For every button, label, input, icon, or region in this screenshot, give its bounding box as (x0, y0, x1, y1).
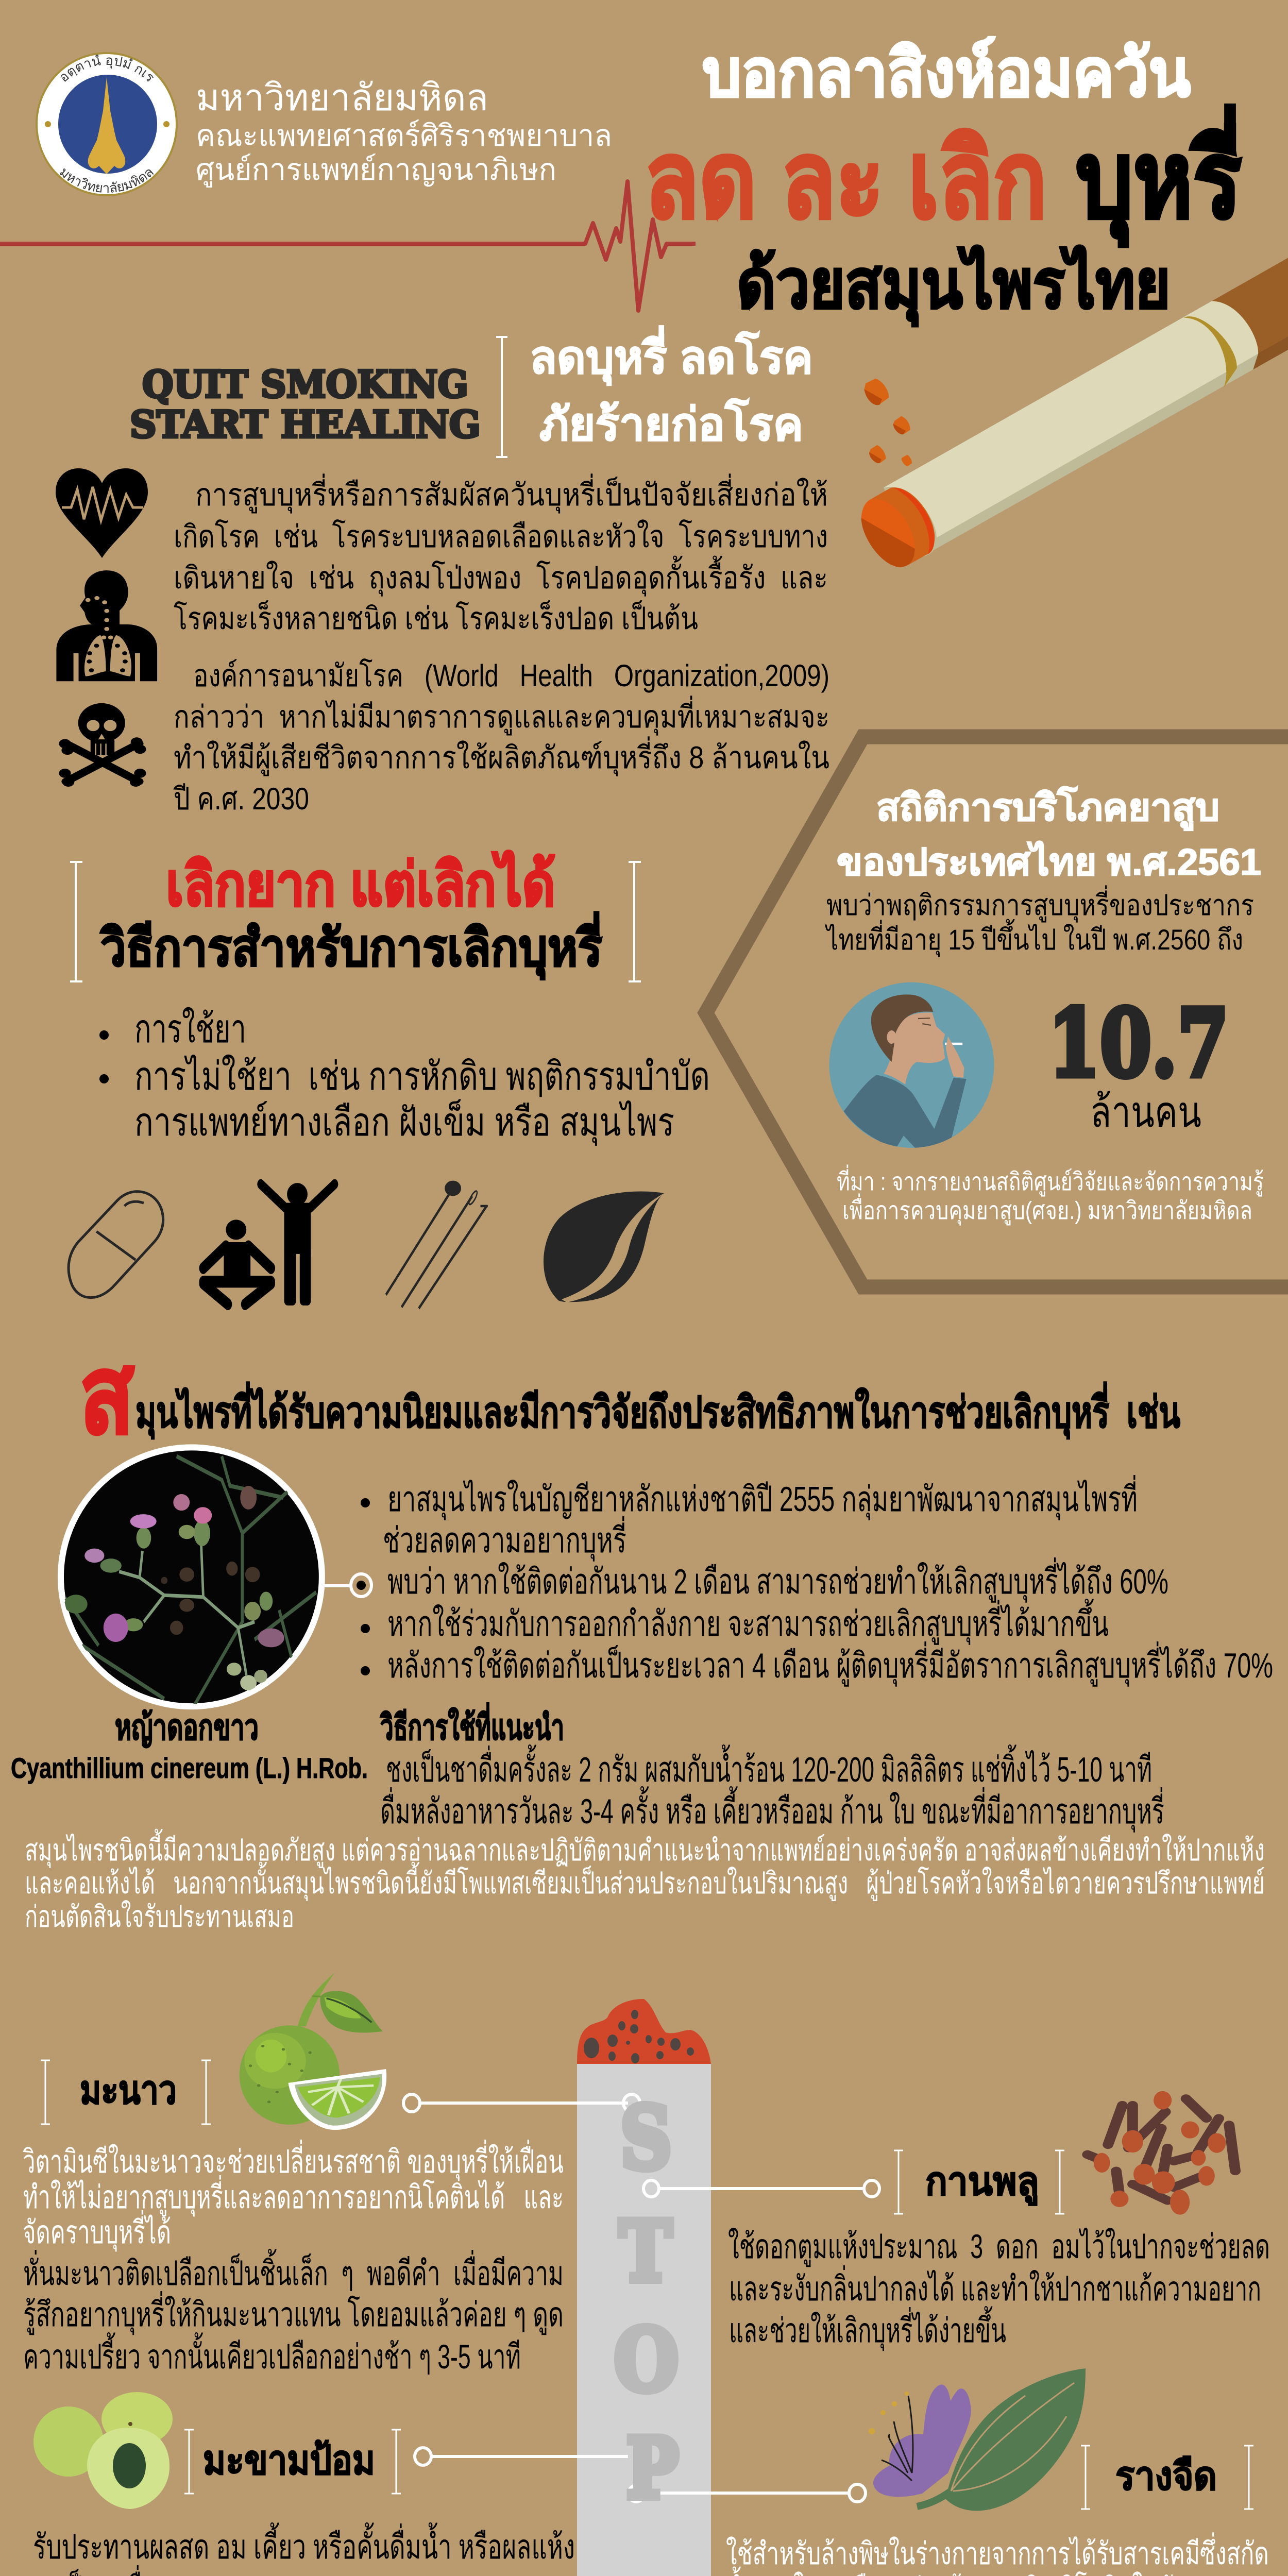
heading: clove (894, 2150, 1064, 2214)
list: herb benefits: ช่วยลดความอยากบุหรี่ (383, 1516, 626, 1562)
panel: smoking statistics text: สถิติการบริโภคยาสูบ (876, 785, 1219, 831)
statistic: 10.7 million people: ล้านคน (1090, 1088, 1201, 1136)
list: quit methods (99, 1007, 710, 1146)
text: amla usage (33, 2522, 575, 2576)
slogan: quit smoking start healing (130, 362, 481, 446)
heading: amla: มะขามป้อม (203, 2437, 375, 2483)
icon: lime fruit (240, 1973, 386, 2130)
panel: statistics outline (706, 737, 1288, 1287)
title: บอกลาสิงห์อมควัน (702, 37, 1191, 110)
header: university logo: อตฺตานํ อุปมํ กเร (61, 55, 154, 82)
STOP lettering: P (626, 2420, 679, 2517)
icon: herbal leaf (544, 1192, 664, 1302)
STOP lettering (614, 2088, 679, 2517)
text: lime benefits: จัดคราบบุหรี่ได้ (23, 2210, 171, 2251)
text block: WHO statement (173, 658, 829, 816)
icon: person with lungs (56, 570, 157, 681)
icon: person smoking (829, 982, 994, 1149)
STOP lettering: S (620, 2088, 672, 2189)
text block: safety warning (25, 1829, 1265, 1934)
icon: cigarette (861, 258, 1288, 567)
slogan: Thai headline: ลดบุหรี่ ลดโรค (530, 326, 813, 386)
header: university name text: มหาวิทยาลัยมหิดล (196, 77, 488, 118)
connector: rang chuet (658, 2484, 866, 2502)
text: clove usage (728, 2227, 1270, 2351)
caption: plant name: Cyanthillium cinereum (L.) H.Rob. (11, 1752, 368, 1784)
icon: acupuncture needles (386, 1181, 488, 1309)
title: ด้วยสมุนไพรไทย (737, 245, 1171, 327)
photo: amla fruit (33, 2392, 173, 2509)
header: university logo (36, 52, 178, 196)
text block: smoking risk intro (174, 473, 828, 636)
slogan: Thai headline (530, 326, 813, 450)
connector: amla (415, 2448, 644, 2502)
title: ลด ละ เลิก (645, 121, 1047, 240)
connector: clove (643, 2180, 879, 2197)
statistic: 10.7 million people: 10.7 (1048, 989, 1229, 1098)
text: lime usage: หั่นมะนาวติดเปลือกเป็นชิ้นเล็ก ๆ พอดีคำ เมื่อมีความ (23, 2249, 564, 2292)
text: lime usage: รู้สึกอยากบุหรี่ให้กินมะนาวแทน โดยอมแล้วค่อย ๆ ดูด (23, 2291, 564, 2335)
text: amla usage: รับประทานผลสด อม เคี้ยว หรือคั้นดื่มน้ำ หรือผลแห้ง (33, 2522, 575, 2566)
heading: rang chuet (1081, 2446, 1253, 2509)
heading: hard to quit but possible (70, 851, 641, 981)
list: quit methods: การใช้ยา (134, 1007, 246, 1051)
heading: hard to quit but possible: เลิกยาก แต่เลิกได้ (166, 851, 555, 918)
panel: smoking statistics text (825, 785, 1261, 957)
header: university name text (196, 77, 612, 188)
heading: amla (184, 2430, 401, 2494)
text block: smoking risk intro: โรคมะเร็งหลายชนิด เช่น โรคมะเร็งปอด เป็นต้น (174, 600, 698, 636)
text: lime usage (23, 2249, 564, 2376)
central cigarette (577, 1999, 711, 2576)
text: lime benefits: วิตามินซีในมะนาวจะช่วยเปลี่ยนรสชาติ ของบุหรี่ให้เฝื่อน (23, 2140, 564, 2181)
slogan: quit smoking start healing: QUIT SMOKING (142, 362, 468, 406)
slogan: Thai headline: ภัยร้ายก่อโรค (539, 398, 803, 450)
text: lime benefits (23, 2140, 564, 2251)
text block: WHO statement: องค์การอนามัยโรค (World Health Organization,2009) (193, 658, 829, 693)
panel: rang chuet (725, 2368, 1278, 2576)
caption: plant name (11, 1708, 368, 1784)
icon: pill (69, 1192, 163, 1298)
icon: ECG heartbeat line (0, 181, 696, 311)
slogan: quit smoking start healing: START HEALING (130, 402, 481, 446)
icon: heart with ECG (56, 468, 148, 558)
source note: statistics (837, 1164, 1264, 1226)
panel: smoking statistics text: ของประเทศไทย พ.ศ.2561 (837, 840, 1261, 883)
icon: skull and crossbones (59, 703, 146, 787)
heading: lime (41, 2060, 211, 2124)
text block: WHO statement: กล่าวว่า หากไม่มีมาตราการดูแลและควบคุมที่เหมาะสมจะ (174, 696, 829, 736)
text block: WHO statement: ทำให้มีผู้เสียชีวิตจากการใช้ผลิตภัณฑ์บุหรี่ถึง 8 ล้านคนใน (174, 736, 829, 776)
heading: researched herbs: ส (80, 1334, 134, 1455)
panel: clove (728, 2091, 1270, 2351)
header: university logo: มหาวิทยาลัยมหิดล (60, 168, 154, 193)
ember (577, 1999, 711, 2064)
heading: researched herbs (80, 1334, 1180, 1455)
text block: smoking risk intro: เดินหายใจ เช่น ถุงลมโป่งพอง โรคปอดอุดกั้นเรื้อรัง และ (174, 555, 828, 597)
cigarette paper (577, 2064, 711, 2576)
heading: clove: กานพลู (925, 2160, 1039, 2206)
list: quit methods: การแพทย์ทางเลือก ฝังเข็ม หรือ สมุนไพร (134, 1099, 674, 1146)
heading: lime: มะนาว (80, 2069, 177, 2112)
photo: Cyanthillium cinereum plant (61, 1447, 322, 1707)
STOP lettering: T (619, 2203, 672, 2300)
list: herb benefits (357, 1475, 1273, 1687)
text: clove usage: และช่วยให้เลิกบุหรี่ได้ง่ายขึ้น (729, 2306, 1006, 2351)
icon: meditation and exercise (204, 1183, 335, 1306)
header: university name text: ศูนย์การแพทย์กาญจนาภิเษก (196, 153, 556, 188)
STOP lettering: O (614, 2310, 679, 2411)
heading: rang chuet: รางจืด (1115, 2454, 1217, 2498)
caption: plant name: หญ้าดอกขาว (115, 1708, 259, 1748)
icon: rang chuet flower and leaf (869, 2368, 1086, 2511)
title (645, 37, 1242, 327)
text: lime usage: ความเปรี้ยว จากนั้นเคียวเปลือกอย่างช้า ๆ 3-5 นาที (23, 2332, 521, 2376)
text block: recommended usage (380, 1702, 1164, 1833)
header: university name text: คณะแพทยศาสตร์ศิริราชพยาบาล (196, 119, 612, 152)
list: quit methods: การไม่ใช้ยา เช่น การหักดิบ พฤติกรรมบำบัด (134, 1054, 710, 1098)
statistic: 10.7 million people (1048, 989, 1229, 1136)
text block: recommended usage: วิธีการใช้ที่แนะนำ (380, 1702, 564, 1747)
text block: smoking risk intro: การสูบบุหรี่หรือการสัมผัสควันบุหรี่เป็นปัจจัยเสี่ยงก่อให้ (195, 473, 828, 514)
connector: lime (403, 2094, 640, 2112)
text: lime benefits: ทำให้ไม่อยากสูบบุหรี่และลดอาการอยากนิโคตินได้ และ (23, 2175, 564, 2216)
text block: WHO statement: ปี ค.ศ. 2030 (173, 782, 309, 816)
panel: amla (33, 2392, 575, 2576)
photo: cloves (1088, 2091, 1235, 2215)
text block: safety warning: ก่อนตัดสินใจรับประทานเสมอ (25, 1900, 294, 1934)
text block: smoking risk intro: เกิดโรค เช่น โรคระบบหลอดเลือดและหัวใจ โรคระบบทาง (174, 519, 828, 554)
connector: photo to bullets (323, 1574, 371, 1597)
heading: hard to quit but possible: วิธีการสำหรับการเลิกบุหรี่ (99, 911, 602, 980)
title: บุหรี่ (1076, 105, 1242, 247)
panel: lime (23, 1973, 564, 2376)
